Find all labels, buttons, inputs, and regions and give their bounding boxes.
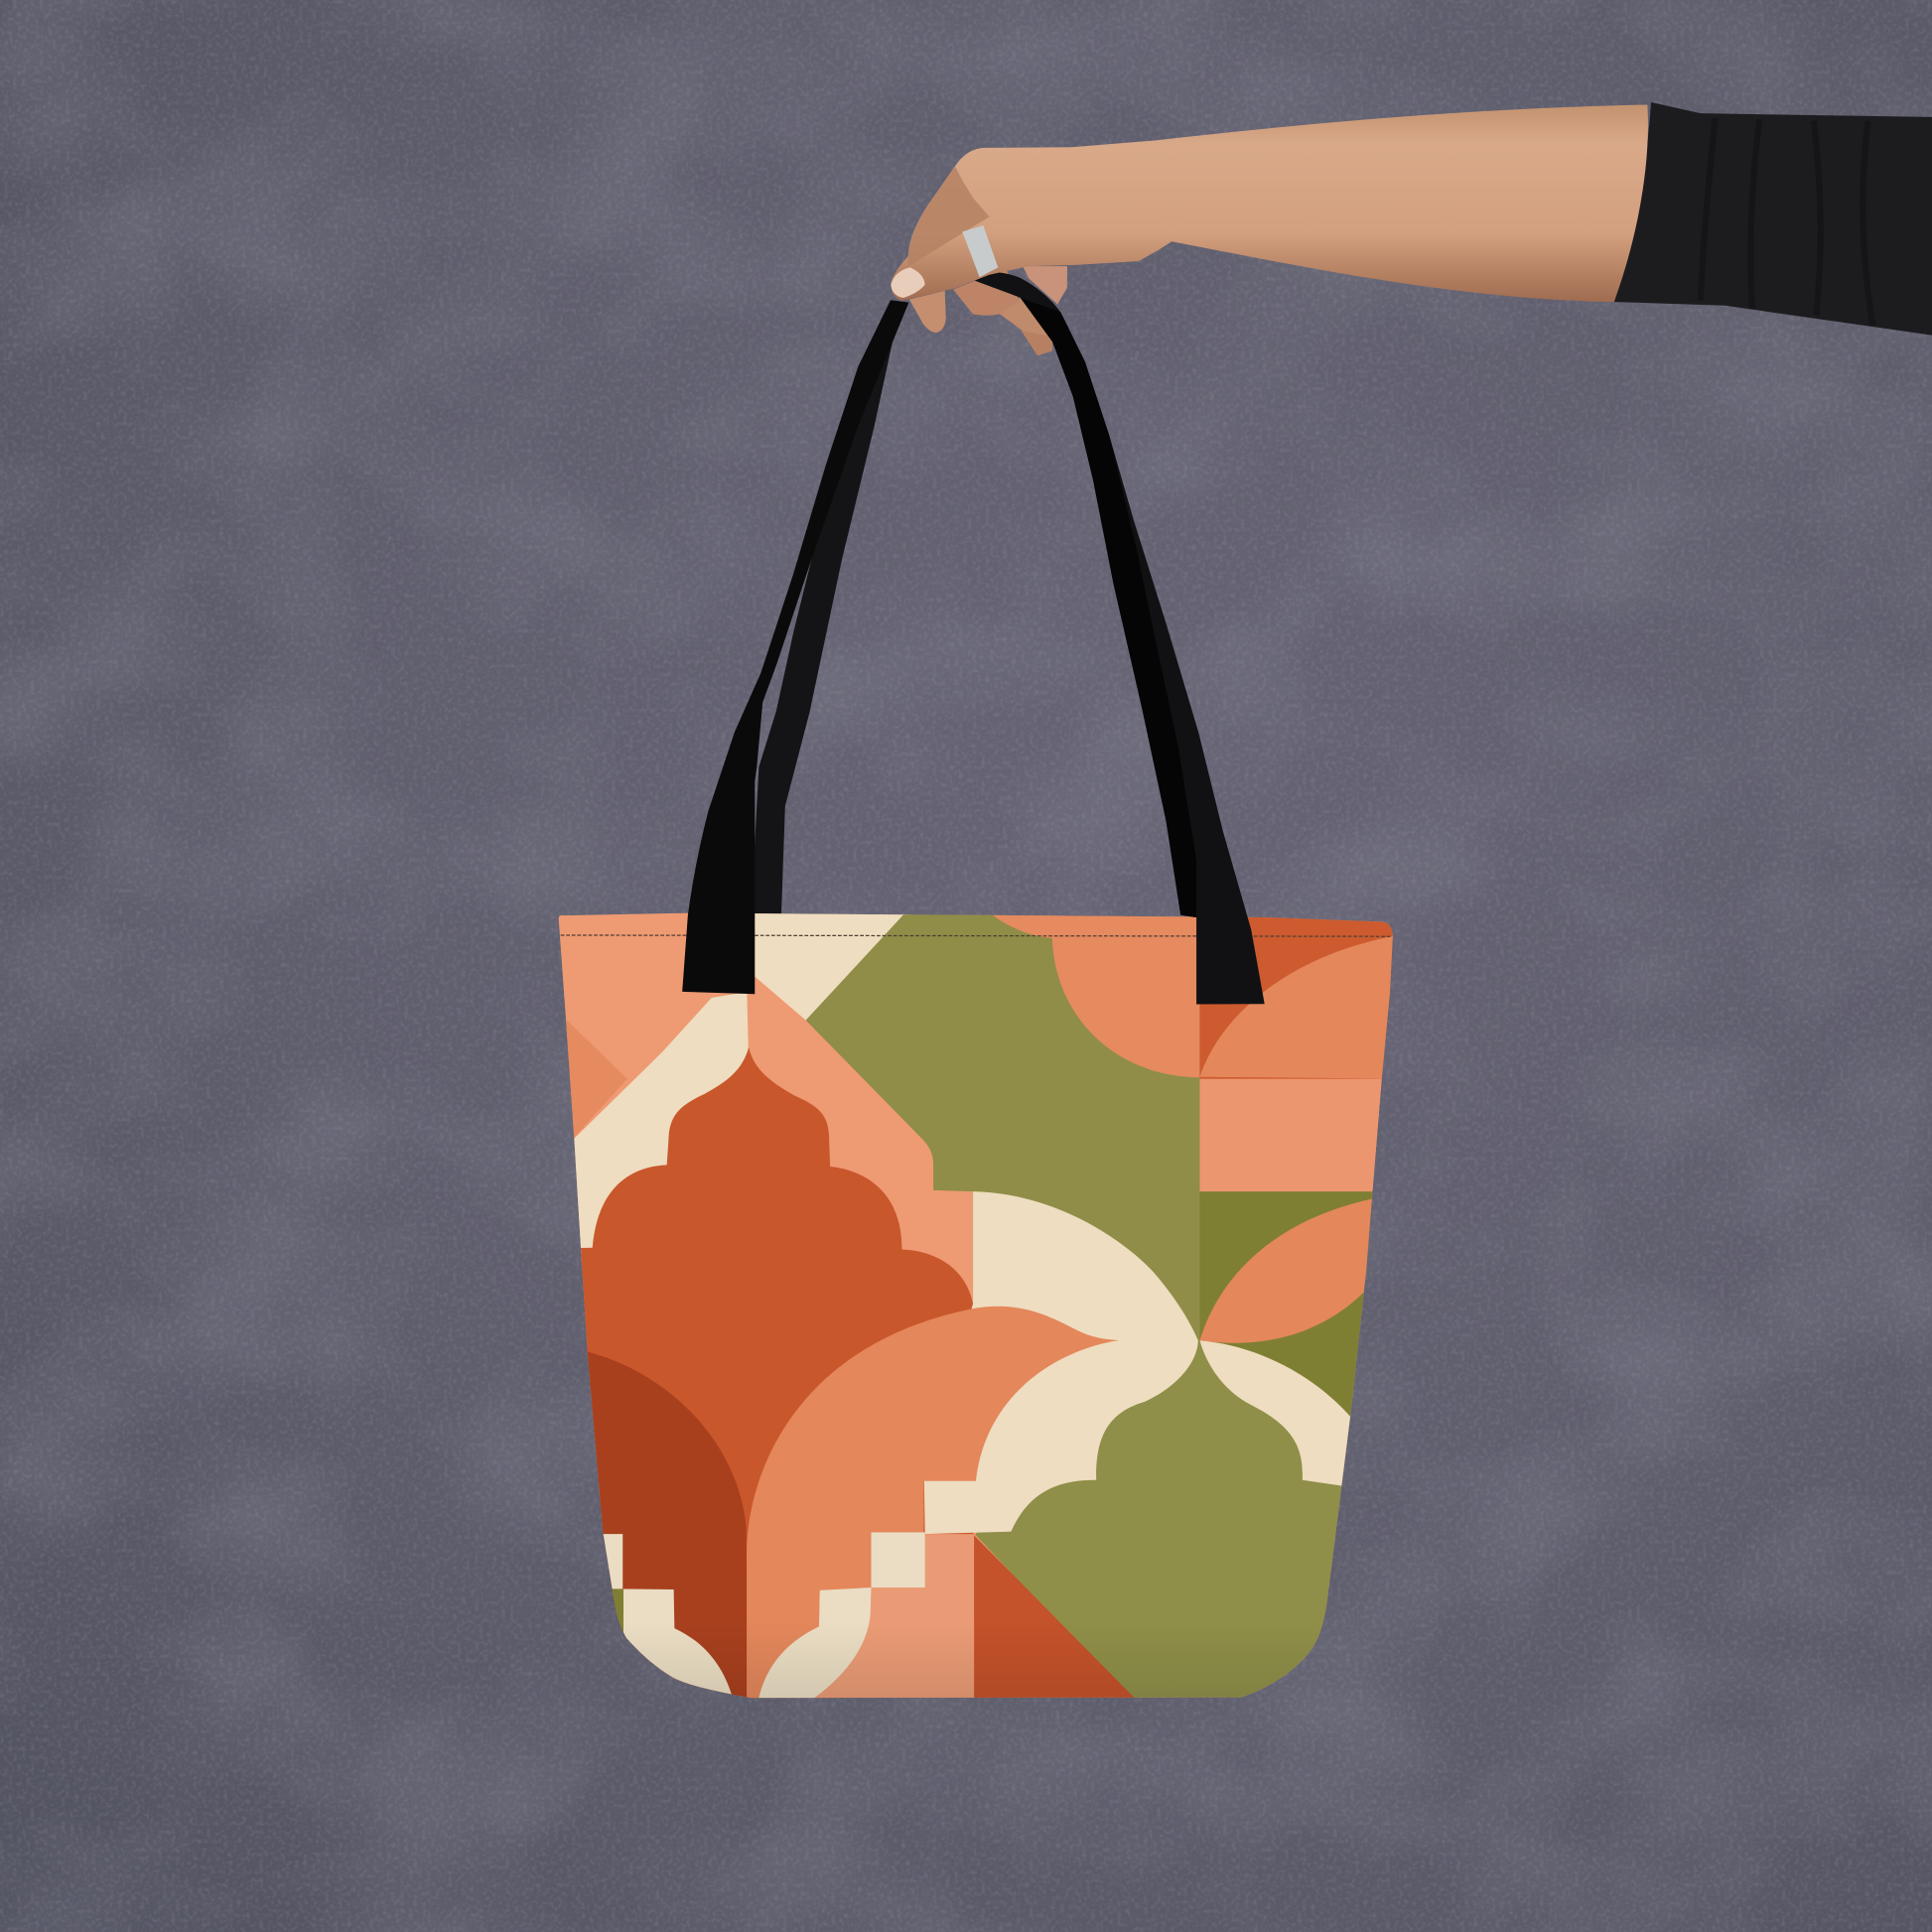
third finger (998, 296, 1050, 336)
orange-red ornament (567, 1047, 973, 1707)
right peach leaf (1199, 1195, 1399, 1343)
shaded bent index finger (908, 167, 990, 266)
orange triangle at the bottom (974, 1535, 1137, 1701)
lower olive ornament (975, 1343, 1405, 1707)
salmon large leaf (747, 1307, 1119, 1707)
cream central band (924, 1191, 1198, 1534)
bottom fold shading (542, 1620, 1405, 1701)
cream right band (1199, 1340, 1405, 1491)
back strand of the left handle (751, 303, 908, 918)
inner dark strand (1021, 298, 1196, 917)
index finger (909, 291, 946, 333)
fingernail (891, 267, 925, 298)
middle finger base (1023, 266, 1067, 305)
cream left band (561, 992, 749, 1263)
cream lower curved step (759, 1587, 871, 1701)
outer strand (967, 272, 1265, 1004)
olive corner sliver (604, 1588, 623, 1645)
silver ring (962, 225, 998, 277)
forearm, hand and thumb (891, 104, 1648, 302)
top orange quarter circle (990, 909, 1199, 1077)
fingers behind the strap (909, 266, 1067, 355)
second finger (953, 269, 1020, 316)
fourth finger (1021, 331, 1052, 355)
cream top triangle (755, 909, 909, 1021)
base peach panel (542, 905, 1405, 1707)
right dark olive panel (1199, 1191, 1405, 1460)
right peach rectangle (1199, 1078, 1382, 1191)
black sleeve (1614, 102, 1932, 336)
tote bag body with geometric pattern (542, 905, 1409, 1707)
cream lower left steps (592, 1534, 734, 1701)
top hem stitching (561, 935, 1392, 936)
right handle (967, 272, 1265, 1004)
left handle front strand (682, 300, 908, 994)
sleeve folds (1701, 118, 1872, 326)
dark red arch (577, 1349, 748, 1707)
top right peach arc (1199, 935, 1405, 1079)
peach lower panel (788, 1534, 974, 1707)
top left shaded peach triangle (566, 1020, 627, 1138)
top right dark orange panel (1199, 917, 1393, 1079)
cream stepped square (871, 1532, 925, 1587)
olive upper panel (806, 909, 1201, 1349)
